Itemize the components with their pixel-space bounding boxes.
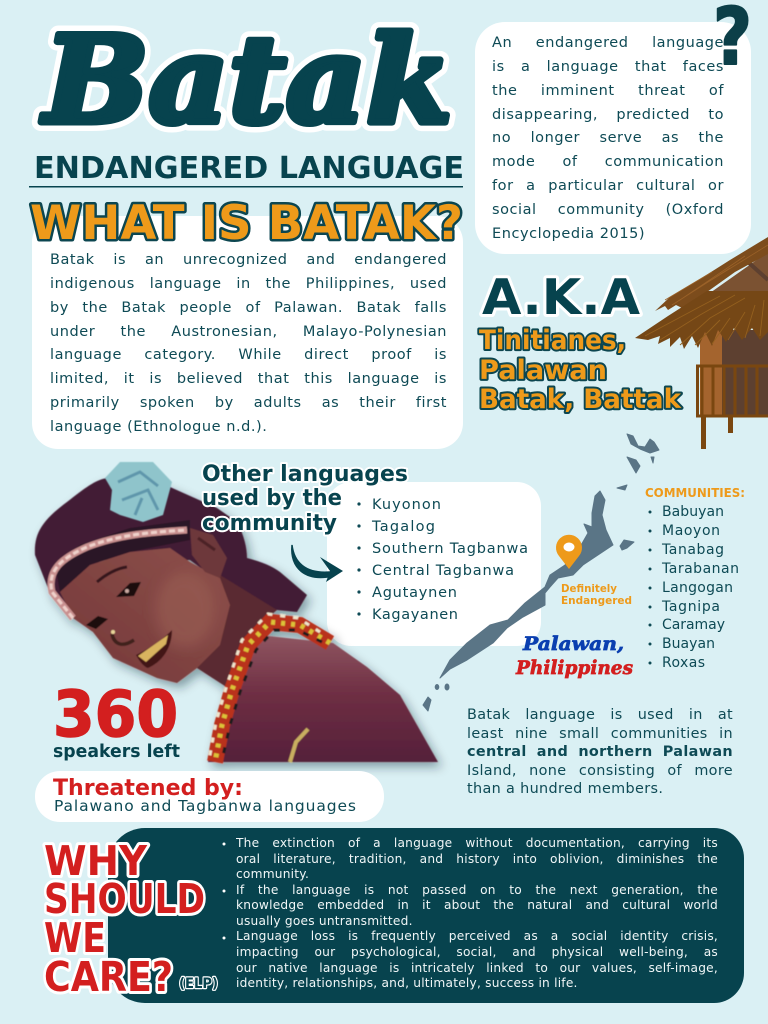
heading: other languages [202,462,408,536]
map: Palawan [423,434,659,711]
icon: location pin [556,535,582,569]
panel: other languages list: Agutaynen [372,585,457,601]
text: communities paragraph: Island, none consisting of more [467,762,733,778]
panel: other languages list: Central Tagbanwa [372,563,514,579]
panel: other languages list: Kagayanen [372,607,458,623]
eyes [116,582,141,597]
heading: why should we care: WHY [44,837,148,885]
panel: why should we care: community. [236,867,309,881]
panel: what is Batak text [32,216,463,449]
panel: why should we care: knowledge embedded in it about the natural and cultural world [236,898,718,912]
aka names [479,325,682,415]
panel: threatened by [35,771,384,822]
communities list: Maoyon [662,523,720,539]
communities list: Tagnipa [661,599,720,615]
text: communities paragraph: Batak language is used in at [467,707,733,723]
stat: 360 speakers left: speakers left [53,742,180,762]
heading: other languages: Other languages [202,462,408,487]
panel: why should we care: Language loss is frequently perceived as a social identity crisis, [236,929,718,943]
panel: what is Batak text: by the Batak people of Palawan. Batak falls [50,300,447,316]
panel: why should we care: The extinction of a language without documentation, carrying its [236,836,718,850]
panel: endangered language definition: mode of communication [492,154,724,170]
neck [197,575,277,688]
text: communities paragraph: than a hundred members. [467,781,663,797]
shoulder [208,636,438,762]
panel: why should we care: If the language is not passed on to the next generation, the [236,883,718,897]
label: definitely endangered: Definitely [561,583,617,595]
communities list: Caramay [662,617,725,633]
communities list: Tanabag [661,542,724,558]
panel: other languages list [327,482,541,646]
heading: other languages: community [202,511,337,536]
panel: why should we care: oral literature, tradition, and history into oblivion, diminishes the [236,852,718,866]
panel: what is Batak text: language (Ethnologue n.d.). [50,419,267,435]
aka names: Batak, Battak [479,384,682,415]
necklace [209,614,330,762]
panel: other languages list: Kuyonon [372,497,441,513]
panel: threatened by: Threatened by: [53,776,243,801]
hair [35,478,307,618]
aka names: Palawan [479,355,607,386]
icon: blue hair flower [105,462,172,522]
face [60,548,230,683]
communities heading: COMMUNITIES: [645,486,745,500]
arm tuft [290,729,308,762]
title: Batak: Batak [41,10,452,151]
communities list: Tarabanan [661,561,739,577]
panel: endangered language definition: the imminent threat of [492,83,724,99]
panel: endangered language definition: social community (Oxford [492,202,724,218]
panel: endangered language definition [475,22,751,254]
heading: why should we care: CARE? [44,953,173,1001]
label: definitely endangered: Endangered [561,595,632,607]
communities list: Babuyan [662,504,724,520]
nose [112,634,134,644]
panel: endangered language definition: disappearing, predicted to [492,107,724,123]
icon: stilt hut [635,237,768,449]
text: communities paragraph: central and northern Palawan [467,744,733,760]
panel: what is Batak text: primarily spoken by adults as their first [50,395,447,411]
panel: what is Batak text: under the Austronesian, Malayo-Polynesian [50,324,447,340]
panel: why should we care [108,828,744,1003]
panel: why should we care: impacting our psychological, social, and physical well-being, as [236,945,718,959]
heading: A.K.A: A.K.A [482,269,640,326]
panel: what is Batak text: Batak is an unrecognized and endangered [50,252,447,268]
ear [190,528,227,578]
panel: what is Batak text: indigenous language in the Philippines, used [50,276,447,292]
panel: endangered language definition: Encyclopedia 2015) [492,226,645,242]
mouth [136,630,172,668]
subtitle: endangered language: ENDANGERED LANGUAGE [34,151,464,186]
label: Palawan, Philippines: Philippines [515,657,633,679]
stat: 360 speakers left: 360 [53,678,178,751]
heading: why should we care [44,837,205,1001]
aka names: Tinitianes, [479,325,626,356]
panel: why should we care: our native language is intricately linked to our values, self-image, [236,960,718,974]
heading: what is Batak: WHAT IS BATAK? [30,196,463,251]
panel: other languages list: Tagalog [371,519,435,535]
panel: endangered language definition: An endangered language [492,35,724,51]
panel: threatened by: Palawano and Tagbanwa languages [54,797,356,815]
panel: why should we care: usually goes untransmitted. [236,914,413,928]
photo: smiling Batak girl [35,478,438,762]
panel: what is Batak text: language category. While direct proof is [50,347,447,363]
communities list: Buayan [662,636,715,652]
label: Palawan, Philippines: Palawan, [522,633,624,655]
heading: other languages: used by the [202,486,342,511]
panel: what is Batak text: limited, it is believed that this language is [50,371,447,387]
text: communities paragraph [467,706,733,802]
heading: why should we care: SHOULD [44,875,205,923]
panel: why should we care: identity, relationships, and, ultimately, success in life. [236,976,578,990]
label: definitely endangered [561,583,632,607]
panel: endangered language definition: no longer serve as the [492,130,724,146]
title: Batak: Batak [41,10,452,151]
communities list: Roxas [662,655,705,671]
panel: endangered language definition: is a language that faces [492,59,724,75]
arrow: to languages list [292,545,343,582]
citation: ELP: (ELP) [179,976,218,992]
panel: other languages list: Southern Tagbanwa [372,541,528,557]
communities list: Langogan [662,580,733,596]
headband [51,530,187,618]
text: communities paragraph: least nine small communities in [467,726,733,742]
heading: why should we care: WE [44,914,106,962]
panel: endangered language definition: for a particular cultural or [492,178,724,194]
communities list [648,504,739,671]
label: Palawan, Philippines [515,633,633,679]
